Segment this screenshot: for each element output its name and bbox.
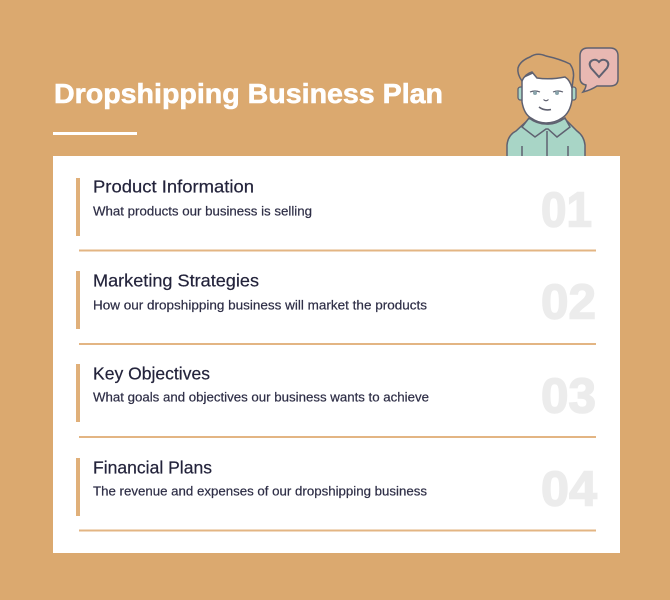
eyes and brows (530, 91, 563, 92)
face (522, 66, 572, 123)
icon: man with heart speech bubble (507, 48, 618, 157)
shirt (507, 119, 585, 157)
row 4: financial plans: Financial Plans (93, 458, 212, 478)
row 3: key objectives: Key Objectives (93, 364, 210, 384)
row 2: marketing strategies (76, 271, 596, 345)
row 4: financial plans (76, 458, 597, 532)
row 3: key objectives: What goals and objectives our business wants to achieve (93, 391, 429, 405)
row 1: product information: Product Information (93, 177, 254, 197)
speech bubble (580, 48, 618, 92)
row 1: product information: What products our business is selling (93, 205, 312, 219)
nose and mouth (544, 100, 548, 101)
panel: content card (53, 156, 620, 553)
row 1: product information (76, 177, 596, 252)
hair (518, 54, 574, 88)
heart (590, 60, 608, 77)
ears (518, 87, 524, 100)
row 4: financial plans: 04 (541, 462, 597, 516)
row 2: marketing strategies: Marketing Strategies (93, 271, 259, 291)
row 1: product information: 01 (541, 184, 592, 238)
row 4: financial plans: The revenue and expenses of our dropshipping business (93, 485, 427, 499)
row 3: key objectives (76, 364, 596, 438)
title underline (53, 132, 137, 135)
collar (522, 118, 570, 137)
row 2: marketing strategies: How our dropshipping business will market the products (93, 299, 427, 313)
row 2: marketing strategies: 02 (541, 276, 596, 330)
title: Dropshipping Business Plan (54, 78, 443, 109)
row 3: key objectives: 03 (541, 370, 596, 424)
